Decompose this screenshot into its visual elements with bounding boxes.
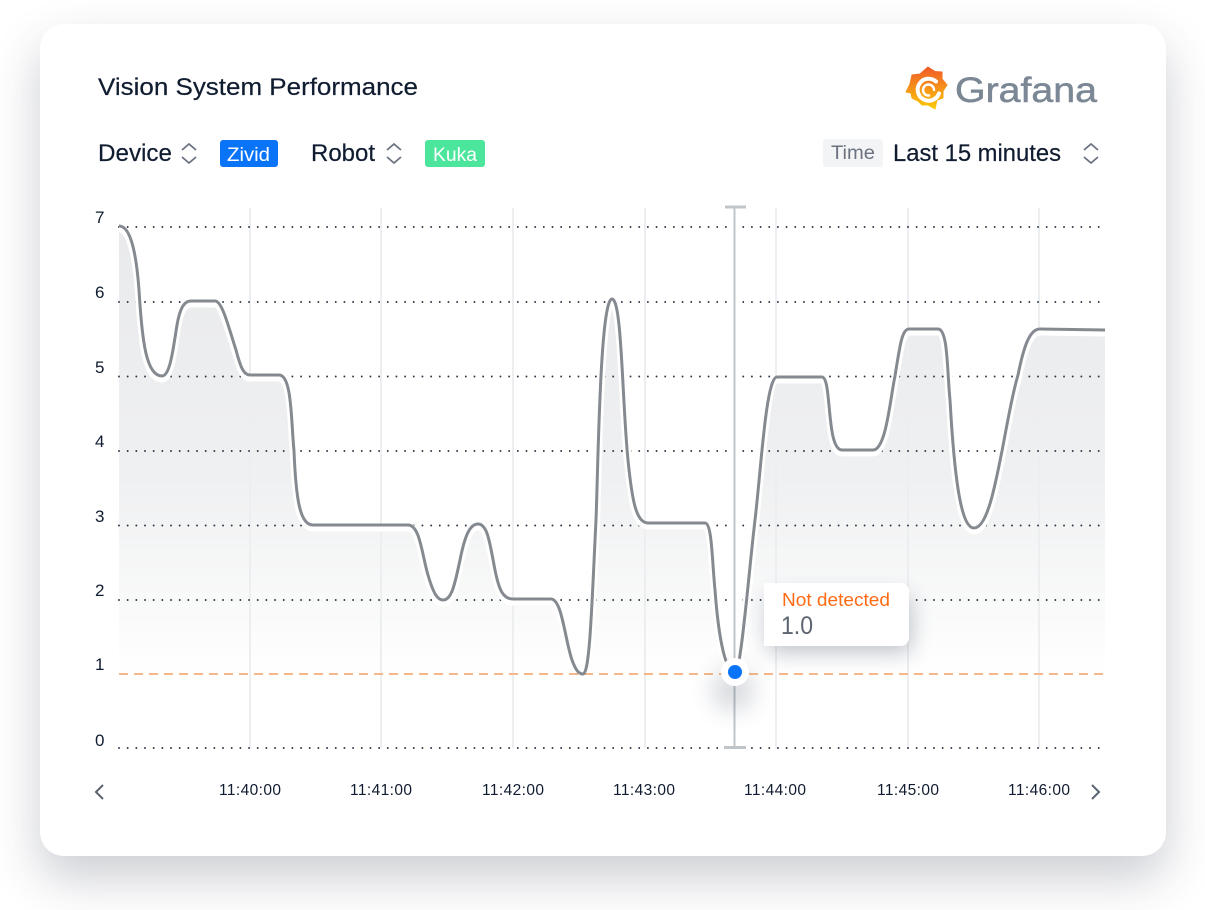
arrow: previous [96,785,103,799]
icon: Grafana logo [906,67,1098,110]
line chart [119,207,1105,748]
y axis labels: 4 [95,432,104,451]
x axis labels: 11:43:00 [613,782,675,799]
series line [119,226,1105,674]
data point marker [711,658,755,712]
logo wordmark: Grafana [955,71,1098,110]
x axis labels: 11:44:00 [744,782,806,799]
icon: device selector chevrons [182,144,196,163]
icon: robot selector chevrons [387,144,401,163]
callout: not detected tooltip: Not detected [782,590,890,610]
badge: Kuka: Kuka [433,145,477,166]
y axis labels: 1 [95,655,104,674]
y axis labels: 0 [95,731,104,750]
y axis labels: 2 [95,581,104,600]
y axis labels: 6 [95,283,104,302]
badge: Time: Time [831,143,875,164]
icon: time selector chevrons [1084,144,1098,163]
arrow: next [1092,785,1099,799]
filter: device [98,140,278,167]
title: Vision System Performance [98,74,418,101]
crosshair [724,207,746,748]
x axis labels: 11:46:00 [1008,782,1070,799]
y axis labels: 7 [95,208,104,227]
callout: not detected tooltip [764,583,911,652]
badge: Zivid [220,140,278,167]
x axis labels: 11:42:00 [482,782,544,799]
x axis labels [219,782,1070,799]
dashboard content [94,66,1105,800]
y axis labels: 5 [95,358,104,377]
filter: device: Device [98,140,172,167]
filter: time range: Last 15 minutes [893,140,1061,167]
x axis labels: 11:40:00 [219,782,281,799]
x axis labels: 11:41:00 [350,782,412,799]
x axis labels: 11:45:00 [877,782,939,799]
chart area fill [119,232,1105,576]
filter: robot: Robot [311,140,375,167]
threshold line [119,673,1105,675]
filter: time range [823,139,1098,167]
badge: Time [823,139,883,167]
series halo [119,228,1105,606]
badge: Zivid: Zivid [227,145,270,166]
y axis labels: 3 [95,507,104,526]
filter: robot [311,140,485,167]
y axis labels [95,208,104,750]
badge: Kuka [425,140,485,167]
callout: not detected tooltip: 1.0 [781,612,813,640]
